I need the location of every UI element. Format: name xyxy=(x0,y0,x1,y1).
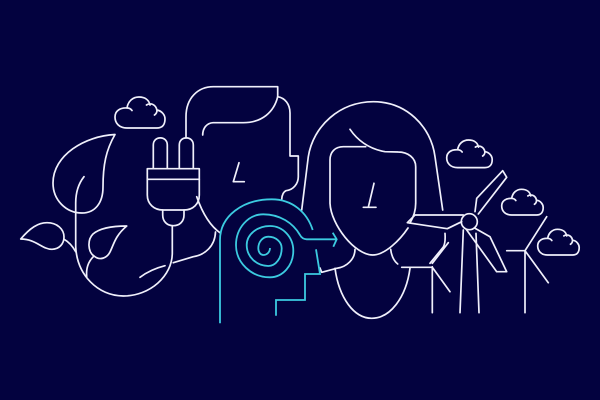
cyan head profile with spiral and arrow xyxy=(220,199,337,323)
wind turbine: small left xyxy=(402,243,450,313)
wind turbine: large xyxy=(407,171,507,313)
cloud: top left xyxy=(115,97,165,128)
cloud: upper right xyxy=(447,140,492,168)
wind turbine: small right xyxy=(507,217,548,313)
cloud: lower right xyxy=(538,229,579,255)
plant with leaves xyxy=(21,134,172,296)
electric plug xyxy=(147,138,199,226)
cloud: middle right xyxy=(502,189,543,215)
woman figure xyxy=(302,102,445,318)
man figure xyxy=(140,87,298,277)
